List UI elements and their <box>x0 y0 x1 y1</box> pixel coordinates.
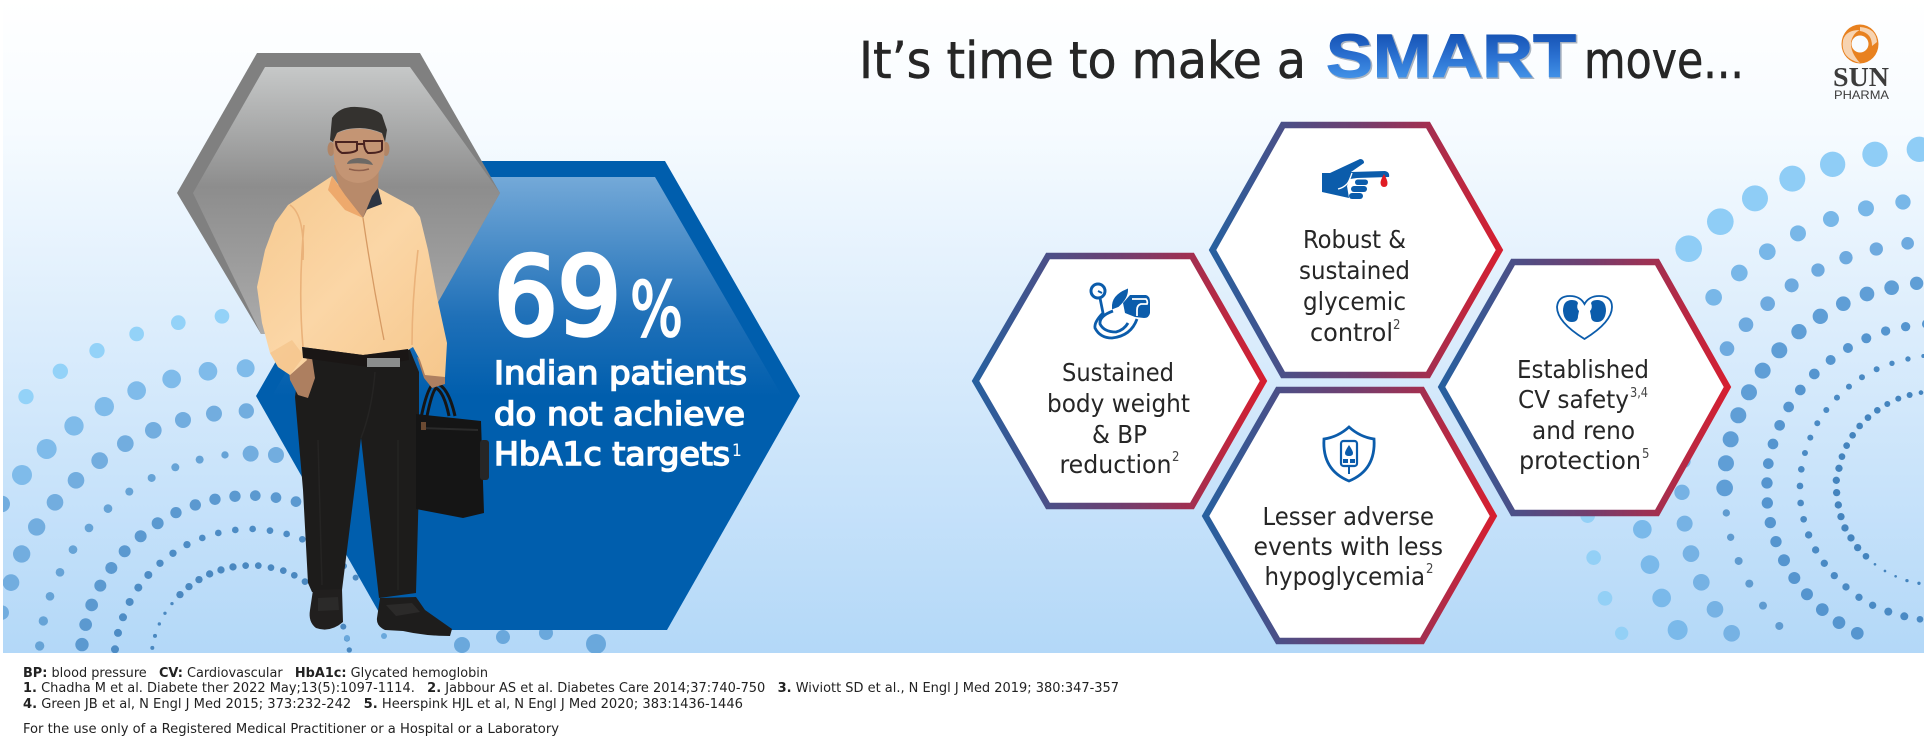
panel: lesser adverse events: 2 <box>1426 562 1433 577</box>
glasses <box>336 141 382 153</box>
shirt <box>257 176 447 377</box>
dot pattern: right <box>1580 137 1924 642</box>
panel: CV safety and reno protection: Established <box>1517 355 1649 384</box>
SMART wordmark: SMART <box>1327 23 1577 91</box>
right shoe <box>377 597 452 636</box>
briefcase <box>416 383 489 518</box>
trousers <box>295 348 419 598</box>
panel: CV safety and reno protection: CV safety <box>1518 385 1629 414</box>
blue statistic hexagon <box>256 161 800 630</box>
man with briefcase <box>257 107 489 636</box>
panel: glycemic control: control <box>1310 318 1393 347</box>
panel: glycemic control: 2 <box>1393 318 1400 333</box>
title: move... <box>1584 32 1744 91</box>
title: It’s time to make a <box>859 32 1306 91</box>
neck <box>334 165 379 218</box>
Sun Pharma logo: SUN <box>1833 62 1890 92</box>
panel: CV safety and reno protection <box>1442 262 1728 513</box>
icon: finger with blood drop <box>1322 159 1389 199</box>
panel: lesser adverse events: events with less <box>1254 532 1443 561</box>
moustache <box>347 158 373 165</box>
footer: abbreviations and references: 1. Chadha M et al. Diabete ther 2022 May;13(5):1097-1114. 2. Jabbour AS et al. Diabetes Care 2014;37:740-750 3. Wiviott SD et al., N Engl J Med 2019; 380:347-357 <box>23 680 1119 696</box>
statistic text: Indian patients <box>494 354 747 392</box>
panel: body weight and BP: body weight <box>1047 389 1190 418</box>
panel: lesser adverse events: hypoglycemia <box>1264 562 1425 591</box>
panel: CV safety and reno protection: 3,4 <box>1630 386 1648 401</box>
Sun Pharma logo: PHARMA <box>1834 88 1889 102</box>
statistic text <box>494 235 747 473</box>
footer: abbreviations and references: For the use only of a Registered Medical Practitioner or a Hospital or a Laboratory <box>23 721 559 737</box>
grey hexagon <box>177 53 500 334</box>
statistic text: % <box>630 265 683 354</box>
panel: lesser adverse events: Lesser adverse <box>1262 502 1434 531</box>
dot pattern: left <box>0 309 606 654</box>
footer: abbreviations and references: 4. Green JB et al, N Engl J Med 2015; 373:232-242 5. Heerspink HJL et al, N Engl J Med 2020; 383:1436-1446 <box>23 696 743 712</box>
panel: body weight and BP: & BP <box>1092 420 1147 449</box>
panel: CV safety and reno protection: protection <box>1519 446 1641 475</box>
icon: shield with glucometer <box>1324 427 1374 481</box>
statistic text: do not achieve <box>494 395 745 433</box>
title <box>859 22 1744 91</box>
statistic text: 1 <box>732 441 742 461</box>
panel: glycemic control: Robust & <box>1303 225 1406 254</box>
panel: CV safety and reno protection: 5 <box>1642 447 1649 462</box>
SMART wordmark: SMART <box>1326 22 1576 90</box>
Sun Pharma logo <box>1833 24 1890 102</box>
belt <box>302 347 409 367</box>
footer: abbreviations and references: BP: blood pressure CV: Cardiovascular HbA1c: Glycated hemoglobin <box>23 665 488 681</box>
collar <box>328 176 363 218</box>
statistic text: HbA1c targets <box>494 435 730 473</box>
panel: body weight and BP: reduction <box>1060 450 1172 479</box>
statistic text: 69 <box>494 235 621 360</box>
panel: glycemic control: sustained <box>1299 256 1410 285</box>
icon: kidneys in heart <box>1557 296 1612 339</box>
panel: CV safety and reno protection: and reno <box>1532 416 1635 445</box>
hair <box>330 107 387 142</box>
panel: body weight and BP: 2 <box>1172 450 1179 465</box>
icon: blood pressure monitor <box>1091 284 1150 338</box>
footer: abbreviations and references <box>23 665 1119 737</box>
panel: lesser adverse events <box>1206 390 1494 641</box>
right hand <box>417 357 445 388</box>
panel: body weight and BP <box>976 256 1264 506</box>
face <box>333 128 385 183</box>
panel: glycemic control: glycemic <box>1303 287 1406 316</box>
panel: body weight and BP: Sustained <box>1062 358 1174 387</box>
left shoe <box>310 589 343 630</box>
ears <box>328 142 334 156</box>
panel: glycemic control <box>1212 125 1500 375</box>
left hand <box>288 358 315 398</box>
